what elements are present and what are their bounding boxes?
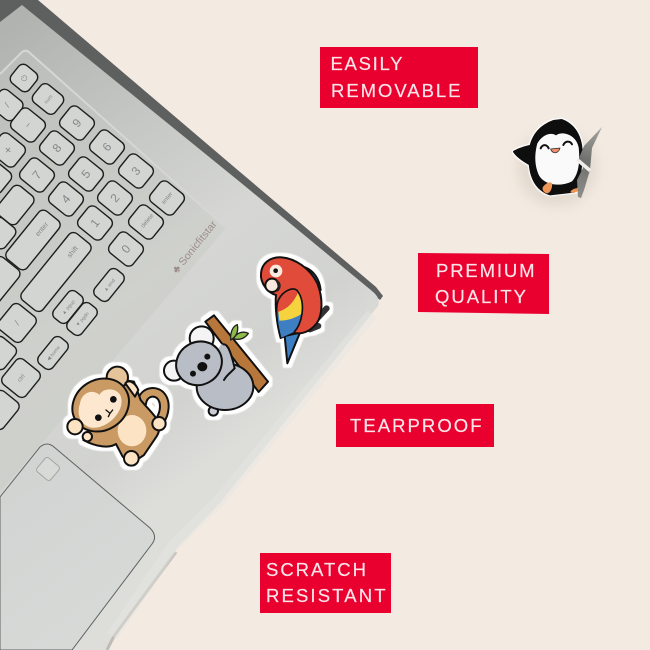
keyboard keys [0,62,187,432]
koala nose [197,362,207,371]
parrot eye patch [270,265,282,277]
key row: number pad: 0 [118,242,134,256]
recess top edge [0,51,226,228]
key row: letters and modifiers: enter [35,221,51,238]
monkey eyes [110,396,117,403]
key row: number pad: − [22,120,34,130]
koala branch [205,315,268,392]
label: tearproof: TEARPROOF [350,415,482,436]
key row: number pad: 2 [107,191,123,205]
laptop brand logo: ♣ Sonicfitstar [170,218,220,276]
koala head [168,333,230,393]
laptop silver body [0,5,379,650]
key row: number pad: ⏻ [19,72,30,84]
arrow keys: ▼ pgdn [75,311,91,328]
koala ears [190,326,214,350]
penguin wing [514,145,535,167]
label: tearproof [336,404,494,447]
penguin belly [535,133,579,185]
penguin beak [551,148,560,153]
sticker: parrot [261,257,327,363]
parrot wing blue band [277,308,302,338]
label: premium quality: PREMIUM [436,260,534,281]
sticker: koala [164,315,268,416]
key row: number pad: / [2,100,12,109]
keyboard recess [0,51,226,492]
penguin eyes [541,142,572,148]
label: scratch resistant: SCRATCH [266,559,366,580]
body lower edge shadow [107,552,176,650]
arrow keys: ◀ home [46,345,62,362]
penguin soft shadow [517,130,597,206]
label: easily removable [320,47,478,108]
peeling paper fold [577,127,602,198]
arrow keys [35,266,127,372]
parrot wing red top [277,289,296,312]
parrot wing outline [277,289,302,338]
label: scratch resistant: RESISTANT [266,585,386,606]
sticker: monkey [62,367,166,466]
arrow keys: ▲ end [103,278,117,293]
label: scratch resistant [260,553,391,613]
parrot wing yellow band [278,291,303,321]
koala arm [213,344,235,382]
koala foot [209,406,218,416]
monkey body [83,380,159,463]
paper fold highlight [576,158,591,172]
key row: letters and modifiers [0,158,94,432]
label: easily removable: EASILY [330,53,402,74]
laptop [0,0,383,650]
koala body [197,363,253,410]
key row: number pad: num [43,94,54,105]
key row: letters and modifiers: / [12,318,22,327]
fingerprint sensor [35,456,61,482]
parrot feet [310,308,327,329]
key row: letters and modifiers: ctrl [17,374,27,384]
parrot back feathers [305,267,321,290]
laptop dark back edge [0,0,383,300]
key row: number pad: 7 [29,168,45,182]
arrow keys: ▲ pgup [61,299,77,316]
parrot body [261,257,322,338]
key row: number pad: + [0,143,16,157]
monkey ear [107,367,128,388]
sticker: penguin [514,119,602,206]
parrot tail [285,333,300,363]
key row: number pad: 3 [128,164,144,178]
koala eyes [204,354,210,360]
penguin head and body [528,119,583,195]
key row: number pad: 6 [99,140,115,154]
koala arm outline [223,344,235,380]
koala leaves [231,325,248,340]
penguin feet [543,182,552,193]
key row: number pad: enter [161,191,174,206]
key row: number pad: 1 [87,216,103,230]
key row: number pad: 9 [69,116,85,130]
key row: number pad: 5 [78,167,94,181]
key row: number pad: . delete [138,213,156,232]
trackpad [0,444,155,650]
light palm rest edge [112,314,372,636]
label: premium quality [418,253,549,314]
monkey face [79,389,122,428]
penguin figure [514,119,583,195]
key row: number pad: 4 [58,192,74,206]
monkey mouth [106,410,113,417]
monkey hands and feet [67,419,83,434]
label: easily removable: REMOVABLE [331,80,460,101]
monkey head [62,368,139,442]
key row: number pad: 8 [49,141,65,155]
monkey tail [142,392,164,422]
label: premium quality: QUALITY [435,286,526,307]
monkey belly [118,415,146,446]
parrot beak [265,279,279,292]
key row: letters and modifiers: shift [66,245,80,260]
key row: number pad [0,62,187,269]
